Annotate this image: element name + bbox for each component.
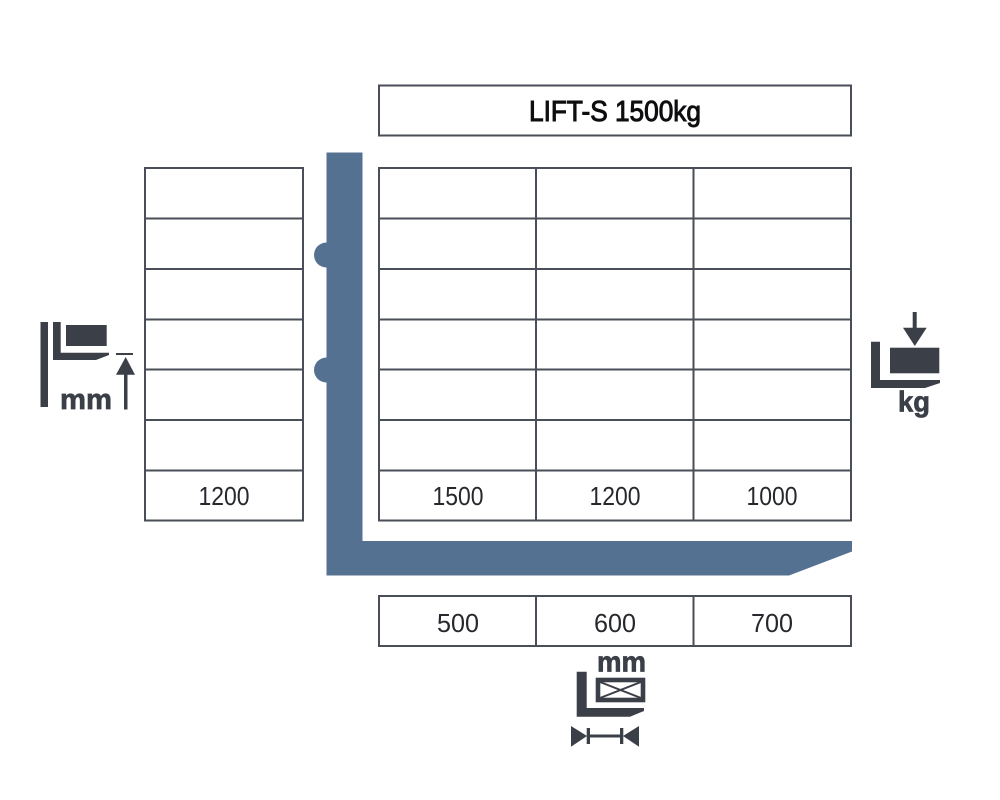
icon: capacity in kg bbox=[871, 312, 940, 419]
load centre table: 700 bbox=[751, 608, 793, 638]
icon: load centre in mm: mm bbox=[597, 647, 646, 679]
title box bbox=[379, 86, 851, 136]
load centre table bbox=[379, 596, 851, 646]
icon: capacity in kg: kg bbox=[898, 387, 930, 419]
icon: lift height in mm: mm bbox=[60, 384, 112, 416]
title box: LIFT-S 1500kg bbox=[529, 96, 701, 128]
main capacity table: 1500 bbox=[432, 481, 484, 511]
left table: lift height: 1200 bbox=[198, 481, 250, 511]
left table: lift height bbox=[145, 168, 303, 520]
icon: load centre in mm bbox=[571, 647, 646, 747]
load centre table: 500 bbox=[437, 608, 479, 638]
main capacity table bbox=[379, 168, 851, 520]
icon: lift height in mm bbox=[40, 322, 135, 416]
load centre table: 600 bbox=[594, 608, 636, 638]
main capacity table: 1000 bbox=[746, 481, 798, 511]
main capacity table: 1200 bbox=[590, 481, 640, 511]
fork silhouette bbox=[314, 152, 852, 576]
